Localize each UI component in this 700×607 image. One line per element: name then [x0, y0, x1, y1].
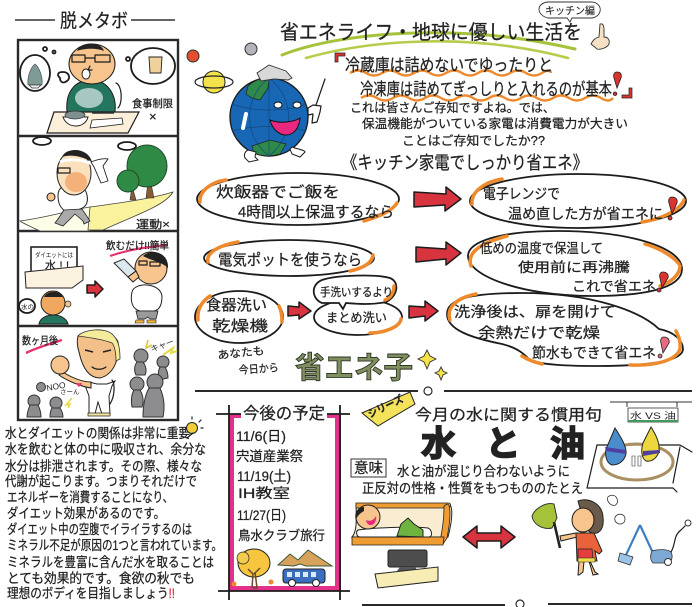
mountains	[278, 550, 332, 566]
speech 水?	[19, 299, 35, 313]
bubble: after washing	[447, 293, 683, 366]
schedule entries: 11/27(日)	[237, 507, 286, 523]
ring	[587, 444, 692, 492]
caption 飲むだけ!!簡単: 飲むだけ!!簡単	[106, 239, 169, 252]
bubble: batch wash	[314, 299, 402, 335]
pink border	[229, 414, 341, 591]
bus	[283, 569, 325, 586]
planets	[187, 43, 257, 93]
panel: idiom series	[351, 392, 692, 588]
arrow 3	[288, 302, 311, 319]
water drop wrestler	[606, 428, 626, 465]
legs	[578, 561, 598, 575]
arrow 1	[414, 187, 461, 211]
bubble: rice cooker	[197, 173, 399, 225]
muscular man	[51, 330, 120, 416]
bubble: microwave: 温め直した方が省エネに	[508, 206, 663, 223]
trees	[117, 145, 167, 200]
comic frame 4: after few months	[22, 330, 177, 417]
text block: water and diet: 代謝が起こります。つまりそれだけで	[5, 474, 197, 489]
comic frame 1: diet restriction	[20, 44, 175, 133]
panel: comic 脱メタボ	[15, 10, 178, 420]
TV	[25, 247, 83, 288]
icon: sparkles	[418, 350, 447, 380]
title: eco life	[280, 2, 609, 58]
bubble: dishwasher: 乾燥機	[212, 318, 268, 335]
caption 数ヶ月後	[22, 334, 62, 353]
thought bubble: bread	[126, 48, 175, 84]
bubble: microwave: 電子レンジで	[483, 186, 560, 203]
text block: water and diet: 水とダイエットの関係は非常に重要	[5, 426, 190, 441]
text block: water and diet: エネルギーを消費することになり、	[7, 490, 173, 505]
path road	[20, 192, 173, 231]
grey fans	[27, 349, 169, 417]
hair and head	[578, 500, 603, 533]
text block: water and diet: ミネラルを豊富に含んだ水を取ることは	[7, 555, 214, 570]
schedule entries	[236, 428, 325, 543]
green swoosh	[282, 33, 575, 58]
schedule entries: IH教室	[238, 486, 290, 501]
bubble: rice cooker: 炊飯器でご飯を	[216, 184, 340, 201]
shout NOOさーん: NOO	[46, 380, 67, 393]
caption 飲むだけ!!簡単	[106, 239, 169, 256]
line 2: 冷凍庫は詰めてぎっしりと入れるのが基本	[360, 80, 612, 99]
text block: intro: 保温機能がついている家電は消費電力が大きい	[362, 116, 628, 131]
double arrow	[463, 526, 515, 548]
logo 省エネ子: 省エネ子	[295, 352, 413, 385]
globe mascot	[230, 65, 325, 162]
icon: light bulb	[186, 417, 203, 438]
caption あなたも今日から	[217, 344, 279, 377]
schedule entries: 11/19(土)	[237, 468, 291, 484]
exclamation mark	[658, 337, 669, 358]
arrow 4	[409, 301, 438, 321]
text block: intro: ことはご存知でしたか??	[402, 133, 545, 148]
title text: 省エネライフ・地球に優しい生活を	[280, 21, 582, 44]
bubble: dishwasher	[195, 291, 283, 343]
duster	[532, 504, 557, 528]
shout NOOさーん: さーん	[60, 388, 80, 396]
bubble: rice cooker: 4時間以上保温するなら	[238, 204, 394, 221]
section heading: kitchen appliances: 《キッチン家電でしっかり省エネ》	[342, 153, 588, 173]
meaning text: 正反対の性格・性質をもつもののたとえ	[362, 481, 583, 496]
comic frame 3: water	[19, 239, 169, 324]
bubble: rather than hand washing	[314, 276, 396, 309]
bubble: rather than hand washing: 手洗いするより	[320, 285, 393, 299]
opening bracket	[335, 53, 345, 62]
arm	[560, 533, 577, 541]
arrow 2	[416, 242, 461, 265]
oil drop wrestler	[642, 427, 659, 461]
text block: water and diet: ミネラル不足が原因の1つと言われています。	[7, 538, 222, 553]
schedule entries: 宍道産業祭	[236, 449, 303, 464]
arrow	[87, 281, 103, 297]
panel: schedule	[216, 404, 350, 600]
series tag: シリーズ	[366, 392, 406, 421]
schedule entries: 11/6(日)	[236, 428, 286, 444]
clouds	[33, 137, 136, 150]
woman cleaning	[532, 500, 603, 575]
text block: water and diet: 水分は排泄されます。その際、様々な	[5, 459, 202, 474]
series tag	[362, 392, 415, 426]
bubble: after washing: 洗浄後は、扉を開けて	[454, 304, 616, 321]
exclamation mark	[668, 197, 677, 220]
bubble: after washing: 節水もできて省エネ	[532, 345, 656, 362]
label 食事制限×: 食事制限	[132, 97, 173, 110]
meaning text	[362, 464, 583, 496]
bubble キッチン編	[539, 2, 600, 22]
wavy underlines	[350, 70, 613, 100]
closing bracket	[622, 88, 632, 98]
TV: 水!!	[45, 259, 69, 272]
running man	[47, 150, 108, 226]
comic heading: 脱メタボ	[60, 10, 128, 32]
text block: water and diet: 理想のボディを目指しましょう!!	[7, 585, 175, 601]
comic frame 2: exercise	[20, 137, 173, 231]
sumo illustration	[587, 402, 692, 492]
body apron	[576, 533, 602, 561]
caption あなたも今日から: 今日から	[238, 360, 279, 377]
dust clouds	[607, 495, 625, 524]
shout NOOさーん	[46, 380, 82, 408]
thought bubble: rice bowl	[20, 47, 56, 91]
text block: intro	[350, 100, 628, 148]
caption 数ヶ月後: 数ヶ月後	[22, 334, 58, 347]
meaning text: 水と油が混じり合わないように	[397, 464, 570, 479]
bubble: dishwasher: 食器洗い	[206, 297, 267, 314]
table with food	[47, 111, 139, 133]
speech 水?: 水の	[21, 302, 34, 311]
bubble: low temperature: 低めの温度で保温して	[480, 241, 603, 256]
viewer	[39, 291, 71, 324]
bubble: electric pot	[204, 240, 374, 276]
label 運動×: 運動×	[136, 217, 170, 231]
TV and stand	[375, 550, 438, 588]
caption あなたも今日から: あなたも	[217, 344, 265, 362]
banner: 水 VS 油	[630, 410, 676, 421]
text block: water and diet: ダイエット効果があるのです。	[7, 506, 165, 521]
icon: pointing hand	[591, 24, 609, 49]
line 1: 冷蔵庫は詰めないでゆったりと	[345, 56, 553, 75]
bubble: batch wash: まとめ洗い	[326, 311, 387, 325]
bubble: after washing: 余熱だけで乾燥	[478, 325, 601, 342]
series heading: 今月の水に関する慣用句	[415, 406, 602, 424]
divider lines	[195, 387, 692, 607]
text block: water and diet: 水を飲むと体の中に吸収され、余分な	[5, 442, 206, 457]
meaning box: 意味	[354, 460, 383, 477]
shout キャー: キャー	[150, 337, 175, 354]
exclamation mark	[613, 72, 621, 96]
bubble: electric pot: 電気ポットを使うなら	[218, 251, 362, 269]
mawashi	[605, 447, 660, 456]
lazy person on sofa	[352, 503, 452, 545]
text block: water and diet: ダイエット中の空腹でイライラするのは	[7, 521, 192, 537]
idiom title: 水と油	[421, 425, 585, 464]
text block: water and diet: とても効果的です。食欲の秋でも	[7, 571, 195, 586]
bubble: low temperature	[468, 231, 682, 296]
bubble: microwave	[470, 174, 686, 228]
cross mark: ×	[149, 109, 157, 124]
bubble: low temperature: これで省エネ	[572, 279, 656, 294]
text block: intro: これは皆さんご存知ですよね。では、	[350, 100, 555, 115]
bubble: low temperature: 使用前に再沸騰	[518, 259, 631, 275]
comic frame	[18, 40, 178, 420]
man drinking water	[114, 252, 168, 323]
text block: water and diet	[5, 426, 222, 601]
exclamation mark	[657, 272, 668, 292]
person at table	[58, 44, 121, 112]
bubble キッチン編: キッチン編	[545, 4, 595, 17]
headline: fridge tip	[335, 53, 632, 100]
schedule heading: 今後の予定	[243, 404, 325, 423]
schedule entries: 鳥水クラブ旅行	[238, 528, 325, 543]
vacuum cleaner	[618, 520, 691, 566]
TV: ダイエットには	[35, 250, 73, 259]
autumn tree	[232, 549, 274, 588]
frame lines	[216, 405, 350, 600]
